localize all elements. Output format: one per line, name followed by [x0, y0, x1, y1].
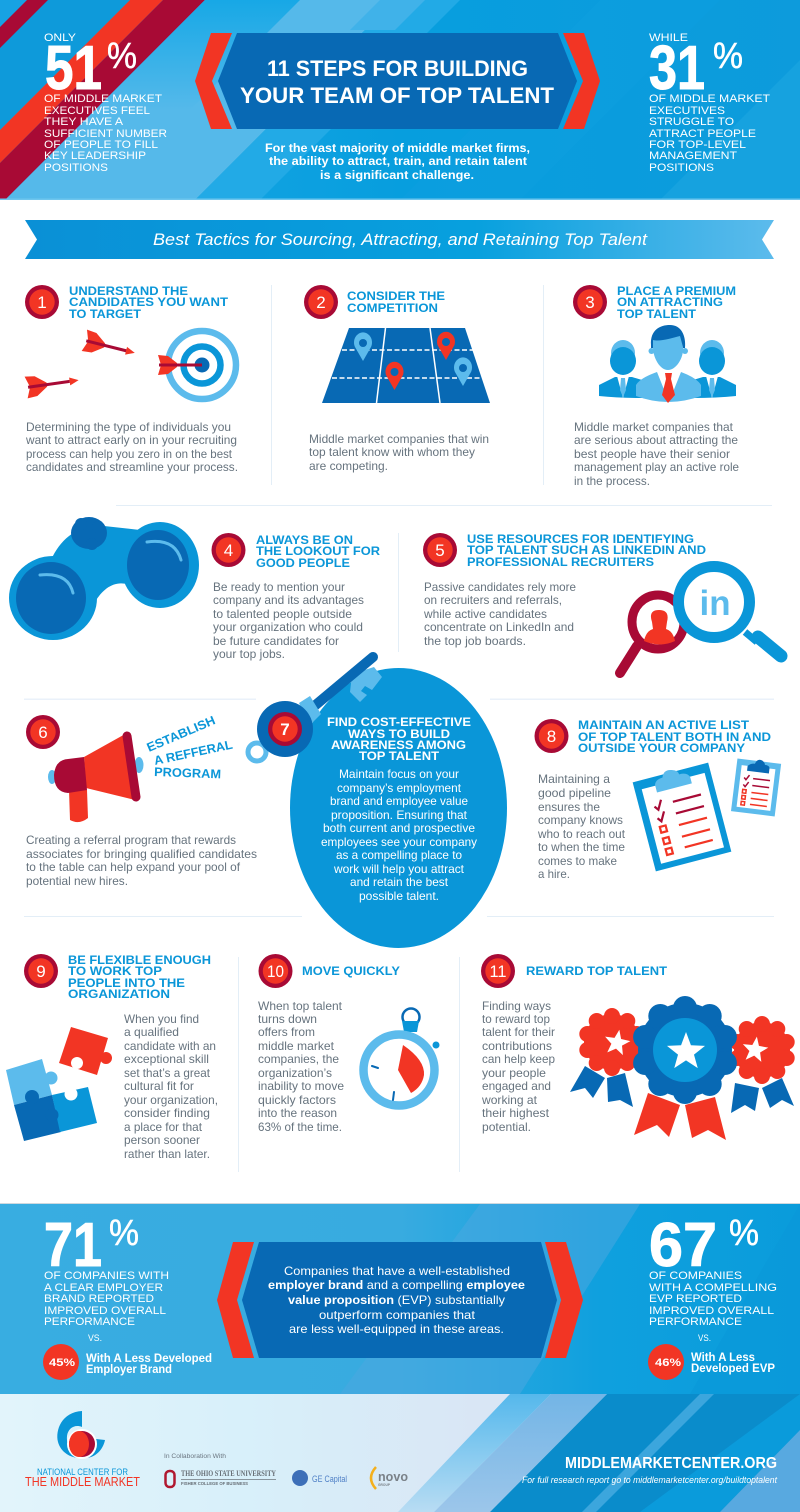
stat: 67 percent: Developed EVP — [691, 1361, 775, 1375]
footer background — [0, 1394, 800, 1512]
header intro text: is a significant challenge. — [320, 168, 474, 182]
step 9: TO WORK TOP — [68, 964, 162, 978]
step 10: inability to move — [258, 1079, 344, 1093]
stat: 31 percent: % — [713, 35, 743, 76]
stat: 71 percent: 71 — [44, 1211, 102, 1280]
center message ribbon: value proposition (EVP) substantially — [288, 1293, 505, 1307]
stat: 71 percent: IMPROVED OVERALL — [44, 1305, 166, 1317]
icon: puzzle pieces — [6, 1027, 112, 1141]
step 5: TOP TALENT SUCH AS LINKEDIN AND — [467, 543, 706, 557]
stat: 51 percent: SUFFICIENT NUMBER — [44, 128, 167, 140]
step 10: companies, the — [258, 1052, 339, 1066]
header intro text — [265, 141, 530, 182]
step 8 — [534, 718, 781, 881]
step 9: exceptional skill — [124, 1052, 209, 1066]
step 1: CANDIDATES YOU WANT — [69, 295, 229, 309]
step 7 oval panel: as a compelling place to — [336, 848, 462, 862]
step 3: best people have their senior — [574, 447, 730, 461]
stat: 71 percent: PERFORMANCE — [44, 1316, 135, 1328]
step 4: company and its advantages — [213, 593, 364, 607]
logo: Ohio State University — [166, 1469, 276, 1487]
logo: GE Capital — [292, 1470, 347, 1486]
stat: 67 percent: 46% — [655, 1357, 681, 1369]
callout: establish a referral program: PROGRAM — [154, 765, 221, 781]
icon: three executives — [599, 325, 736, 403]
header intro text: the ability to attract, train, and retain talent — [269, 154, 527, 168]
step 11: potential. — [482, 1120, 531, 1134]
partner logos — [164, 1453, 408, 1489]
step 7 oval panel: both current and prospective — [323, 821, 475, 835]
center message ribbon: Companies that have a well-established — [284, 1264, 510, 1278]
step 3: TOP TALENT — [617, 307, 697, 321]
stat: 67 percent: VS. — [698, 1333, 711, 1343]
step 4: Be ready to mention your — [213, 580, 345, 594]
icon: key with badge 7 — [248, 657, 382, 761]
icon: magnifiers with LinkedIn: in — [700, 584, 730, 623]
step 4: GOOD PEOPLE — [256, 556, 350, 570]
stat: 31 percent: WHILE — [649, 32, 688, 44]
step 10: offers from — [258, 1025, 315, 1039]
step 5: while active candidates — [423, 607, 547, 621]
logo: Novo Group — [371, 1467, 408, 1489]
step 8: 8 — [547, 727, 556, 746]
step 7 oval panel: WAYS TO BUILD — [348, 727, 450, 741]
step 11: REWARD TOP TALENT — [526, 964, 668, 978]
step 8: comes to make — [538, 854, 617, 868]
stat: 51 percent: EXECUTIVES FEEL — [44, 105, 150, 117]
step 8: OF TOP TALENT BOTH IN AND — [578, 730, 771, 744]
stat: 31 percent — [649, 32, 770, 174]
header intro text: For the vast majority of middle market firms, — [265, 141, 530, 155]
step 10: quickly factors — [258, 1093, 336, 1107]
step 2 — [304, 285, 490, 473]
step 3: in the process. — [574, 474, 650, 488]
step 1: TO TARGET — [69, 307, 142, 321]
step 4: 4 — [224, 541, 233, 560]
step 2: 2 — [316, 293, 326, 312]
stat: 31 percent: OF MIDDLE MARKET — [649, 93, 770, 105]
stat: 71 percent: 45% — [49, 1357, 75, 1369]
step 11 — [481, 954, 795, 1140]
step 7 oval panel: work will help you attract — [333, 862, 465, 876]
center message ribbon: employer brand and a compelling employee — [268, 1278, 525, 1292]
stat: 71 percent — [43, 1211, 212, 1380]
stat: 71 percent: VS. — [88, 1333, 102, 1343]
icon: stopwatch — [364, 1008, 440, 1106]
logo: National Center for the Middle Market: THE MIDDLE MARKET — [25, 1475, 140, 1489]
step 3: PLACE A PREMIUM — [617, 284, 736, 298]
callout: establish a referral program: ESTABLISH — [145, 713, 217, 755]
step 7 oval panel: and retain the best — [350, 875, 449, 889]
step 5: PROFESSIONAL RECRUITERS — [467, 555, 654, 569]
step 9: consider finding — [124, 1106, 210, 1120]
stat: 67 percent: EVP REPORTED — [649, 1293, 742, 1305]
stat: 51 percent: POSITIONS — [44, 162, 108, 174]
step 4: your top jobs. — [213, 647, 285, 661]
step 1: 1 — [37, 293, 47, 312]
step 10: middle market — [258, 1039, 335, 1053]
step 6: 6 — [38, 723, 48, 742]
title ribbon: 11 STEPS FOR BUILDING — [267, 56, 528, 81]
logo: GE Capital: GE Capital — [312, 1474, 347, 1484]
step 5 — [423, 532, 781, 673]
step 4: your organization who could — [213, 620, 363, 634]
stat: 51 percent: 51 — [45, 34, 102, 103]
stat: 31 percent: STRUGGLE TO — [649, 116, 734, 128]
logo: Novo Group: GROUP — [378, 1482, 390, 1487]
step 10: MOVE QUICKLY — [302, 964, 400, 978]
logo: National Center for the Middle Market: NATIONAL CENTER FOR — [37, 1467, 128, 1478]
step 1 — [25, 284, 238, 474]
step 10: When top talent — [258, 999, 343, 1013]
step 11: their highest — [482, 1106, 550, 1120]
step 5: on recruiters and referrals, — [424, 593, 562, 607]
step 11: to reward top — [482, 1012, 550, 1026]
section banner: Best Tactics for Sourcing, Attracting, and Retaining Top Talent — [153, 230, 648, 249]
stat: 67 percent: With A Less — [691, 1350, 755, 1364]
step 3: ON ATTRACTING — [617, 295, 723, 309]
icon: clipboards — [632, 757, 781, 871]
step 1: candidates and streamline your process. — [26, 460, 238, 474]
step 6: associates for bringing qualified candidates — [26, 847, 257, 861]
stat: 71 percent: % — [109, 1212, 139, 1253]
icon: award rosettes — [570, 996, 795, 1140]
stat: 71 percent: OF COMPANIES WITH — [44, 1270, 169, 1282]
step 10 — [258, 954, 440, 1134]
step 11: engaged and — [482, 1079, 551, 1093]
step 10: 10 — [267, 962, 284, 981]
stat: 31 percent: ATTRACT PEOPLE — [649, 128, 756, 140]
stat: 67 percent — [648, 1211, 777, 1380]
logo: Novo Group: novo — [378, 1469, 408, 1484]
partner logos: In Collaboration With — [164, 1453, 226, 1460]
header background — [0, 0, 800, 200]
step 2: Middle market companies that win — [309, 432, 489, 446]
title ribbon — [195, 33, 600, 129]
step 6: potential new hires. — [26, 874, 128, 888]
step 5: 5 — [435, 541, 445, 560]
step 4: ALWAYS BE ON — [256, 533, 353, 547]
step 10: into the reason — [258, 1106, 337, 1120]
step 8: good pipeline — [538, 786, 611, 800]
step 1: Determining the type of individuals you — [26, 420, 231, 434]
step 10: 63% of the time. — [258, 1120, 342, 1134]
step 9: When you find — [124, 1012, 199, 1026]
step 3: management play an active role — [574, 460, 739, 474]
step 11: contributions — [482, 1039, 552, 1053]
step 5: Passive candidates rely more — [424, 580, 576, 594]
icon: magnifiers with LinkedIn — [620, 566, 781, 673]
step 9: BE FLEXIBLE ENOUGH — [68, 953, 211, 967]
step 11: working at — [481, 1093, 538, 1107]
step 7 oval panel: proposition. Ensuring that — [331, 808, 468, 822]
stat: 31 percent: MANAGEMENT — [649, 150, 737, 162]
step 9: rather than later. — [124, 1147, 210, 1161]
stat: 71 percent: A CLEAR EMPLOYER — [44, 1282, 163, 1294]
title ribbon: YOUR TEAM OF TOP TALENT — [240, 83, 555, 108]
step 3: Middle market companies that — [574, 420, 734, 434]
stat: 31 percent: FOR TOP-LEVEL — [649, 139, 746, 151]
step 8: Maintaining a — [538, 772, 610, 786]
step 11: 11 — [490, 962, 506, 981]
step 4: be future candidates for — [213, 634, 339, 648]
step 2: COMPETITION — [347, 301, 438, 315]
stat: 71 percent: Employer Brand — [86, 1362, 172, 1376]
step 7 oval panel: AWARENESS AMONG — [331, 738, 466, 752]
step 9: 9 — [36, 962, 46, 981]
stat: 71 percent: With A Less Developed — [86, 1351, 212, 1365]
step 8: ensures the — [538, 800, 600, 814]
step 8: MAINTAIN AN ACTIVE LIST — [578, 718, 750, 732]
step 6: to the table can help expand your pool of — [26, 860, 241, 874]
step 7 oval panel: company’s employment — [337, 781, 462, 795]
step 9: person sooner — [124, 1133, 200, 1147]
step 7 oval panel — [290, 668, 507, 948]
step 11: Finding ways — [482, 999, 551, 1013]
step 3: 3 — [585, 293, 595, 312]
stat: 67 percent: OF COMPANIES — [649, 1270, 742, 1282]
step 7 oval panel: FIND COST-EFFECTIVE — [327, 715, 471, 729]
step 6 — [26, 713, 257, 888]
step 7 oval panel: possible talent. — [359, 889, 439, 903]
step 4: THE LOOKOUT FOR — [256, 544, 380, 558]
step 9: your organization, — [124, 1093, 218, 1107]
step 2: are competing. — [309, 459, 388, 473]
step 8: a hire. — [538, 867, 570, 881]
step 9: a qualified — [124, 1025, 179, 1039]
icon: target and darts — [25, 330, 236, 399]
step 8: who to reach out — [537, 827, 626, 841]
stat: 71 percent: BRAND REPORTED — [44, 1293, 154, 1305]
callout: establish a referral program — [145, 713, 234, 781]
step 4: to talented people outside — [213, 607, 352, 621]
icon: key with badge 7: 7 — [280, 720, 290, 739]
step 7 oval panel: employees see your company — [321, 835, 477, 849]
step 8: OUTSIDE YOUR COMPANY — [578, 741, 745, 755]
step 2: CONSIDER THE — [347, 289, 445, 303]
footer call to action: For full research report go to middlemarketcenter.org/buildtoptalent — [522, 1475, 777, 1486]
stat: 31 percent: 31 — [649, 34, 705, 103]
stat: 51 percent: OF PEOPLE TO FILL — [44, 139, 158, 151]
stat: 51 percent: ONLY — [44, 32, 77, 44]
stat: 67 percent: WITH A COMPELLING — [649, 1282, 777, 1294]
step 9: a place for that — [124, 1120, 203, 1134]
logo: National Center for the Middle Market — [25, 1411, 140, 1489]
stat: 51 percent: THEY HAVE A — [44, 116, 124, 128]
section banner — [25, 220, 774, 259]
step 5: USE RESOURCES FOR IDENTIFYING — [467, 532, 694, 546]
stat: 51 percent: OF MIDDLE MARKET — [44, 93, 162, 105]
stat: 67 percent: % — [729, 1212, 759, 1253]
step 1: process can help you zero in on the best — [26, 447, 233, 461]
stat: 67 percent: 67 — [649, 1211, 717, 1280]
center message ribbon: outperform companies that — [319, 1308, 476, 1322]
step 5: concentrate on LinkedIn and — [424, 620, 574, 634]
center message ribbon: are less well-equipped in these areas. — [289, 1322, 504, 1336]
step 9: cultural fit for — [124, 1079, 194, 1093]
bottom stats band background — [0, 1203, 800, 1394]
icon: megaphone — [48, 733, 144, 822]
step 2: top talent know with whom they — [309, 445, 475, 459]
step 4 — [212, 533, 380, 661]
step 3: are serious about attracting the — [574, 433, 738, 447]
stat: 67 percent: IMPROVED OVERALL — [649, 1305, 774, 1317]
callout: establish a referral program: A REFFERAL — [153, 738, 234, 768]
footer call to action — [522, 1455, 777, 1486]
step 7 oval panel: TOP TALENT — [359, 749, 440, 763]
step 10: organization’s — [258, 1066, 332, 1080]
stat: 31 percent: EXECUTIVES — [649, 105, 725, 117]
logo: Ohio State University: FISHER COLLEGE OF BUSINESS — [181, 1481, 249, 1487]
stat: 67 percent: PERFORMANCE — [649, 1316, 742, 1328]
step 11: your people — [482, 1066, 546, 1080]
step 9 — [6, 953, 218, 1161]
step 7 oval panel: brand and employee value — [330, 794, 468, 808]
stat: 51 percent: KEY LEADERSHIP — [44, 150, 146, 162]
step 10: turns down — [258, 1012, 317, 1026]
icon: binoculars — [9, 517, 199, 640]
stat: 51 percent: % — [107, 35, 137, 76]
step 11: can help keep — [482, 1052, 555, 1066]
footer call to action: MIDDLEMARKETCENTER.ORG — [565, 1455, 777, 1472]
step 5: the top job boards. — [424, 634, 526, 648]
icon: map with pins — [322, 328, 490, 403]
step 9: PEOPLE INTO THE — [68, 976, 185, 990]
step 9: ORGANIZATION — [68, 987, 170, 1001]
step 11: talent for their — [482, 1025, 555, 1039]
step 7 oval panel: Maintain focus on your — [339, 767, 459, 781]
stat: 51 percent — [44, 32, 167, 174]
step 6: Creating a referral program that rewards — [26, 833, 236, 847]
step 8: to when the time — [538, 840, 625, 854]
step 1: UNDERSTAND THE — [69, 284, 188, 298]
step 1: want to attract early on in your recruiting — [25, 433, 237, 447]
step 3 — [573, 284, 739, 488]
step 9: candidate with an — [124, 1039, 216, 1053]
step 8: company knows — [538, 813, 623, 827]
step 9: set that’s a great — [124, 1066, 211, 1080]
stat: 31 percent: POSITIONS — [649, 162, 714, 174]
center message ribbon — [217, 1242, 583, 1358]
logo: Ohio State University: THE OHIO STATE UNIVERSITY — [181, 1469, 276, 1478]
